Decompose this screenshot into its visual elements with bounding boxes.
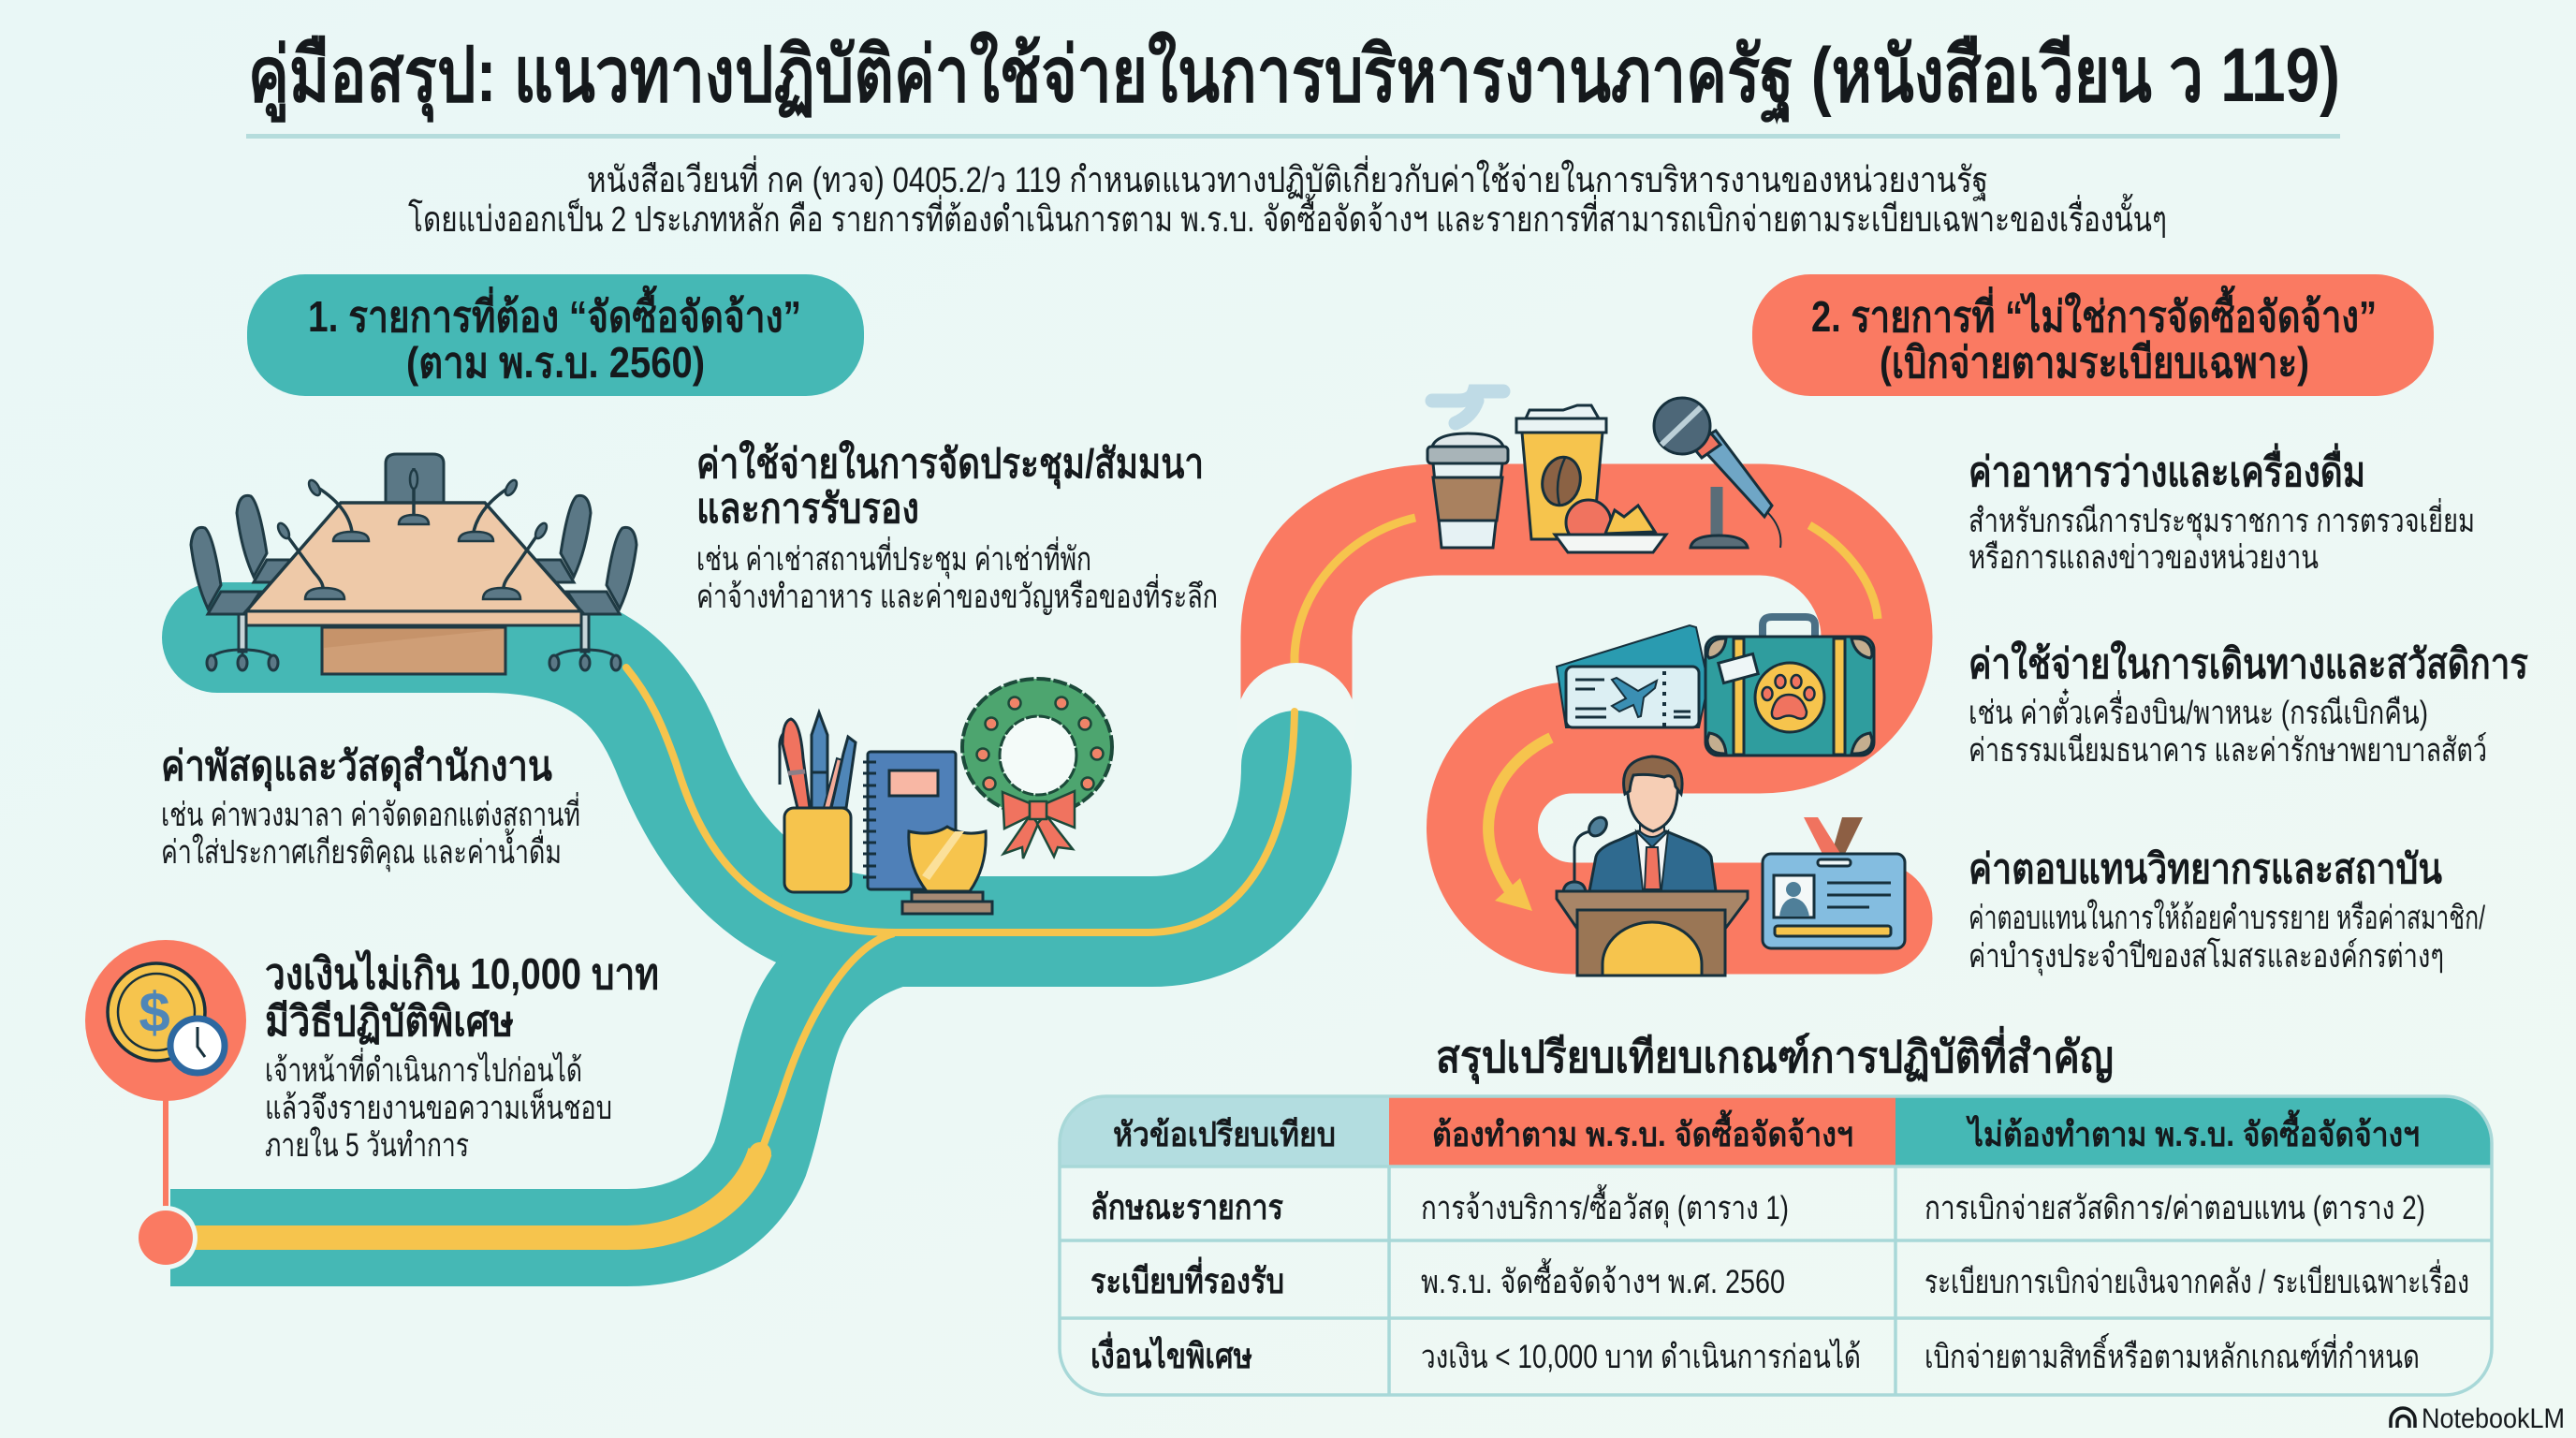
teal ribbon path [170, 638, 1296, 1238]
table row: item type: การจ้างบริการ/ซื้อวัสดุ (ตาราง 1) [1421, 1183, 1789, 1227]
table row: item type: การเบิกจ่ายสวัสดิการ/ค่าตอบแทน (ตาราง 2) [1925, 1190, 2425, 1226]
table heading: สรุปเปรียบเทียบเกณฑ์การปฏิบัติที่สำคัญ [1436, 1025, 2114, 1084]
text: 10,000 baht limit: มีวิธีปฏิบัติพิเศษ [265, 999, 514, 1045]
pill heading: non-procurement [1752, 274, 2434, 396]
pill heading: procurement [247, 274, 864, 396]
pill heading: procurement: 1. รายการที่ต้อง “จัดซื้อจัดจ้าง” [308, 285, 801, 341]
icon: money and clock circle [85, 940, 246, 1269]
text: speakers and institutions: ค่าบำรุงประจำปีของสโมสรและองค์กรต่างๆ [1969, 937, 2444, 976]
pill heading: non-procurement: (เบิกจ่ายตามระเบียบเฉพาะ) [1880, 338, 2309, 387]
table row: special condition: เบิกจ่ายตามสิทธิ์หรือตามหลักเกณฑ์ที่กำหนด [1925, 1333, 2420, 1375]
icon: speaker at podium [1557, 756, 1748, 976]
text: meetings and receptions: ค่าใช้จ่ายในการจัดประชุม/สัมมนา [696, 439, 1204, 490]
coral ribbon path [1237, 518, 1932, 974]
icon: shield trophy [902, 827, 992, 914]
table header row: หัวข้อเปรียบเทียบ [1113, 1115, 1336, 1153]
text: speakers and institutions [1969, 846, 2485, 976]
table header row: ไม่ต้องทำตาม พ.ร.บ. จัดซื้อจัดจ้างฯ [1965, 1109, 2420, 1153]
icon: money and clock circle: $ [139, 981, 170, 1044]
text: speakers and institutions: ค่าตอบแทนวิทยากรและสถาบัน [1969, 846, 2442, 892]
text: 10,000 baht limit: เจ้าหน้าที่ดำเนินการไปก่อนได้ [265, 1048, 582, 1089]
table header row [1060, 1096, 2492, 1167]
text: 10,000 baht limit: ภายใน 5 วันทำการ [265, 1126, 469, 1164]
text: office supplies: ค่าใส่ประกาศเกียรติคุณ และค่าน้ำดื่ม [161, 828, 562, 872]
text: office supplies: ค่าพัสดุและวัสดุสำนักงาน [161, 743, 552, 792]
icon: pen holder [780, 712, 856, 892]
text: 10,000 baht limit [265, 949, 659, 1164]
text: 10,000 baht limit: แล้วจึงรายงานขอความเห็นชอบ [265, 1088, 612, 1126]
text: meetings and receptions: เช่น ค่าเช่าสถานที่ประชุม ค่าเช่าที่พัก [696, 536, 1091, 579]
table row: special condition: เงื่อนไขพิเศษ [1090, 1331, 1252, 1375]
text: 10,000 baht limit: วงเงินไม่เกิน 10,000 บาท [265, 949, 659, 998]
intro text [408, 155, 2167, 240]
text: travel and welfare: เช่น ค่าตั๋วเครื่องบิน/พาหนะ (กรณีเบิกคืน) [1969, 688, 2428, 731]
comparison table [1060, 1096, 2492, 1395]
text: meetings and receptions: และการรับรอง [696, 486, 919, 532]
table row: regulation [1090, 1256, 2469, 1300]
table row: special condition: วงเงิน < 10,000 บาท ดำเนินการก่อนได้ [1421, 1338, 1861, 1375]
icon: wreath [962, 679, 1112, 858]
table row: item type [1090, 1183, 2425, 1227]
icon: id badge [1763, 817, 1905, 948]
table row: special condition [1090, 1331, 2420, 1375]
pill heading: non-procurement: 2. รายการที่ “ไม่ใช่การจัดซื้อจัดจ้าง” [1811, 285, 2377, 341]
table row: regulation: พ.ร.บ. จัดซื้อจัดจ้างฯ พ.ศ. 2560 [1421, 1257, 1785, 1300]
icon: coffee and snacks [1427, 391, 1666, 552]
pill heading: procurement: (ตาม พ.ร.บ. 2560) [406, 338, 705, 387]
icon: microphone [1654, 398, 1780, 548]
text: office supplies: เช่น ค่าพวงมาลา ค่าจัดดอกแต่งสถานที่ [161, 792, 580, 833]
table header row: ต้องทำตาม พ.ร.บ. จัดซื้อจัดจ้างฯ [1432, 1109, 1853, 1153]
intro text: หนังสือเวียนที่ กค (ทวจ) 0405.2/ว 119 กำหนดแนวทางปฏิบัติเกี่ยวกับค่าใช้จ่ายในการบริหารงานของหน่วยงานรัฐ [587, 155, 1988, 201]
icon: conference table [191, 454, 637, 674]
text: meetings and receptions [696, 439, 1218, 615]
text: travel and welfare [1969, 639, 2528, 769]
text: snacks and drinks [1969, 443, 2475, 576]
table row: regulation: ระเบียบที่รองรับ [1090, 1256, 1284, 1300]
icon: plane ticket [1557, 625, 1708, 727]
icon: notebook [863, 752, 956, 889]
text: meetings and receptions: ค่าจ้างทำอาหาร และค่าของขวัญหรือของที่ระลึก [696, 574, 1218, 615]
text: snacks and drinks: ค่าอาหารว่างและเครื่องดื่ม [1969, 443, 2365, 495]
table row: item type: ลักษณะรายการ [1090, 1188, 1283, 1226]
text: snacks and drinks: หรือการแถลงข่าวของหน่วยงาน [1969, 539, 2319, 576]
text: office supplies [161, 743, 580, 872]
icon: suitcase [1705, 617, 1874, 756]
